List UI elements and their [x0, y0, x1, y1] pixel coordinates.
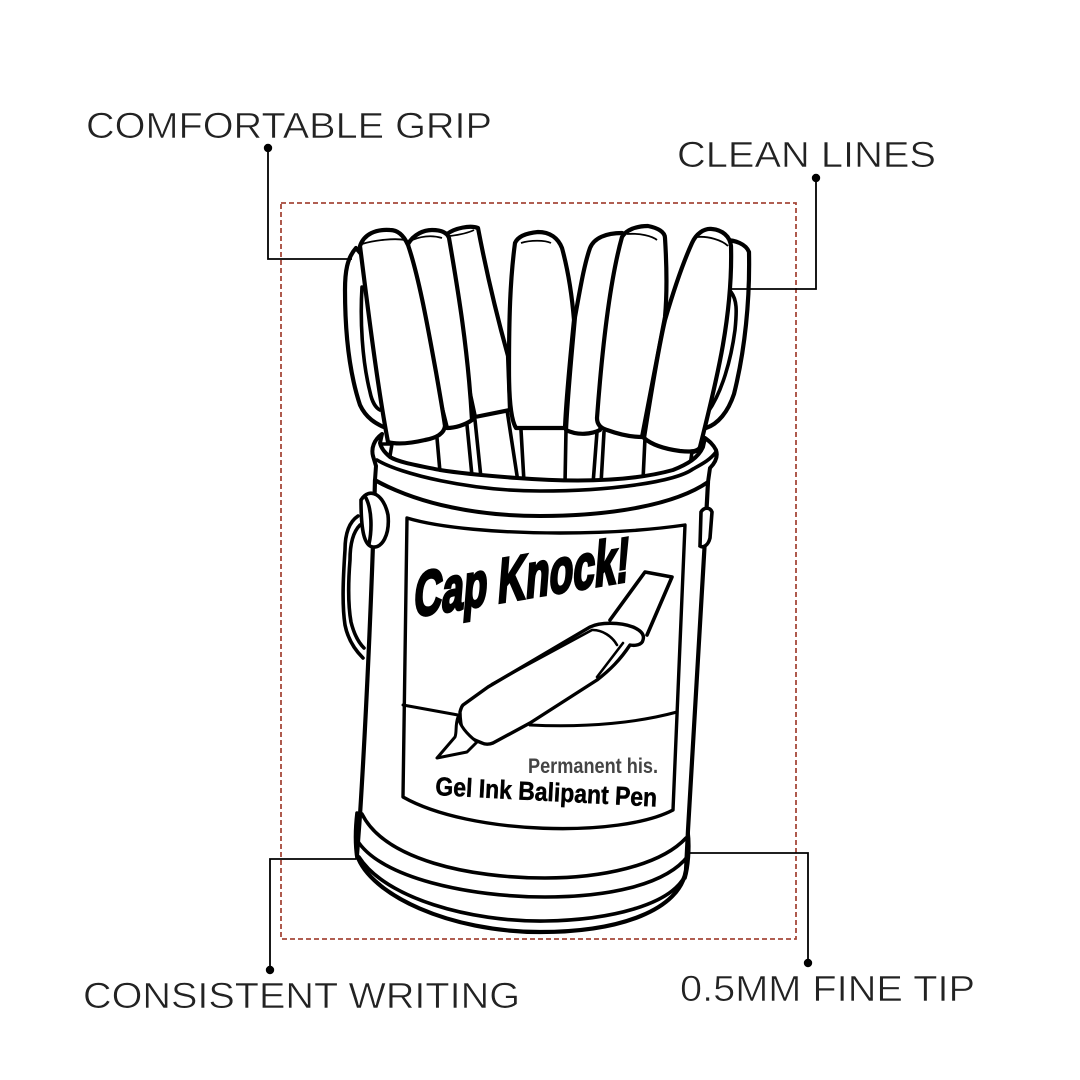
callout: clean lines — [677, 134, 936, 289]
leader line — [268, 148, 352, 259]
illustration: bucket of pens — [343, 226, 749, 932]
brand name: Cap Knock! — [412, 524, 632, 631]
product name: Gel Ink Balipant Pen — [435, 771, 658, 813]
bucket label — [403, 518, 685, 829]
bucket body — [357, 480, 708, 932]
dashed product frame — [281, 203, 796, 939]
label: CLEAN LINES — [677, 134, 936, 175]
pen barrels inside bucket — [437, 410, 692, 484]
bucket rim — [372, 434, 717, 516]
pen caps — [360, 226, 731, 452]
back pens — [345, 240, 749, 428]
label: 0.5MM FINE TIP — [680, 968, 975, 1009]
callout: consistent writing — [83, 859, 520, 1016]
callout: comfortable grip — [86, 105, 492, 259]
handle lugs — [361, 493, 712, 547]
leader line — [270, 859, 356, 970]
label: CONSISTENT WRITING — [83, 975, 520, 1016]
label: COMFORTABLE GRIP — [86, 105, 492, 146]
left handle — [343, 516, 364, 658]
leader line — [730, 178, 816, 289]
horizon line — [403, 705, 677, 726]
pen drawing — [437, 572, 672, 758]
leader line — [690, 853, 808, 963]
tagline: Permanent his. — [528, 755, 658, 778]
callout: fine tip — [680, 853, 975, 1009]
bottom rings — [356, 813, 689, 921]
